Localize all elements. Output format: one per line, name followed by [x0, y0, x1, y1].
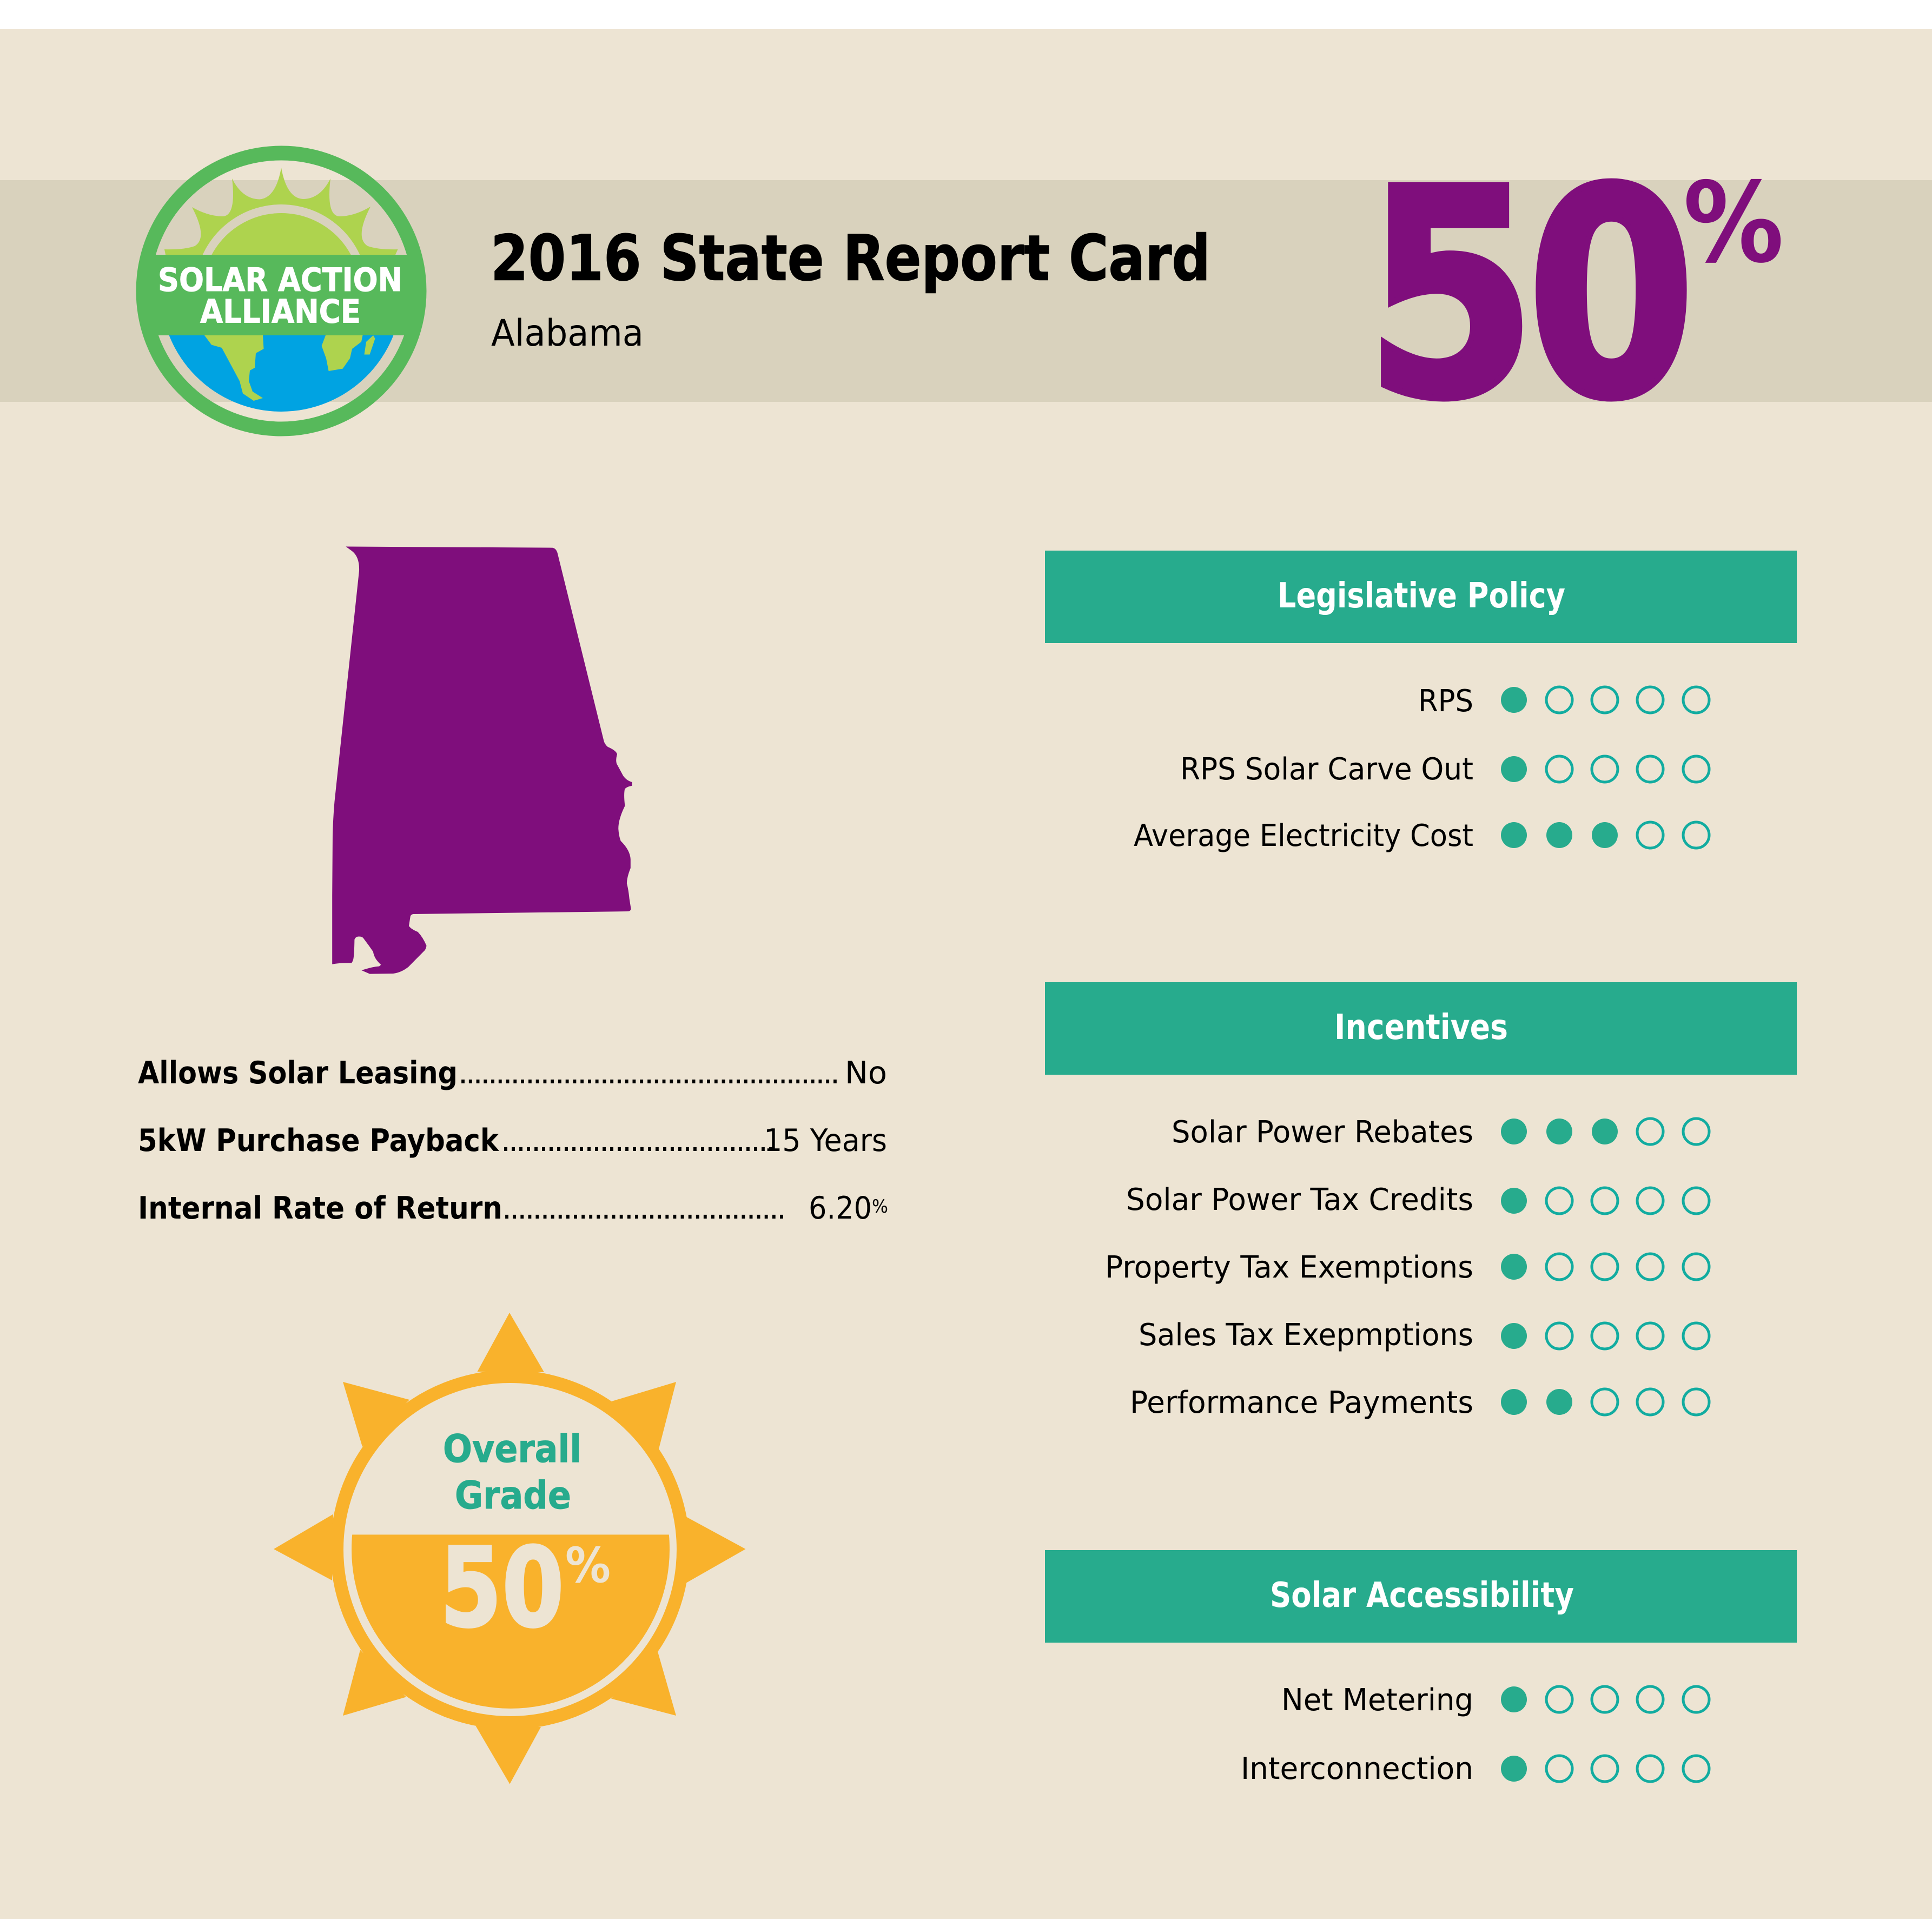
row: RPS solar carve out: [1180, 752, 1709, 787]
title: 2016 State Report Card: [491, 222, 1210, 295]
logo name line 2: ALLIANCE: [200, 293, 361, 331]
big score: 50%: 5: [1365, 128, 1537, 462]
stat: allows solar leasing: ...................................................: [458, 1055, 840, 1091]
grade percent sign: %: [565, 1537, 611, 1594]
stat: purchase payback: 5kW Purchase Payback: [138, 1123, 499, 1159]
big score: 50%: [1365, 128, 1784, 462]
overall grade sun badge: [274, 1313, 745, 1784]
panel: incentives: [1045, 982, 1797, 1420]
heading: Legislative Policy: [1278, 576, 1565, 616]
logo name line 1: SOLAR ACTION: [158, 261, 402, 299]
row: solar power rebates: Solar Power Rebates: [1172, 1115, 1473, 1150]
row: net metering: Net Metering: [1281, 1683, 1473, 1718]
row: sales tax exemptions: Sales Tax Exepmptions: [1139, 1318, 1473, 1353]
big score: 50%: %: [1683, 159, 1784, 288]
stat: allows solar leasing: Allows Solar Leasing: [138, 1055, 458, 1091]
logo sun: [164, 168, 398, 255]
heading: Incentives: [1334, 1008, 1508, 1048]
row: RPS solar carve out: RPS Solar Carve Out: [1180, 752, 1473, 787]
row: performance payments: [1130, 1385, 1709, 1420]
panel: legislative policy: [1045, 551, 1797, 853]
row: solar power tax credits: Solar Power Tax Credits: [1126, 1182, 1473, 1217]
sun rays: [274, 1313, 745, 1784]
row: average electricity cost: [1134, 818, 1709, 853]
stat: purchase payback: ....................................: [501, 1123, 776, 1159]
grade value: 50: [440, 1524, 564, 1652]
row: average electricity cost: Average Electricity Cost: [1134, 818, 1473, 853]
heading bar: [1045, 982, 1797, 1075]
sun ring: [337, 1377, 683, 1723]
heading: Solar Accessibility: [1270, 1576, 1574, 1616]
overall label: Overall: [443, 1427, 581, 1471]
heading bar: [1045, 551, 1797, 643]
row: net metering: [1281, 1683, 1709, 1718]
row: interconnection: [1241, 1751, 1709, 1786]
stat: internal rate of return: 6.20: [809, 1190, 872, 1226]
row: RPS: RPS: [1418, 684, 1473, 719]
heading bar: [1045, 1550, 1797, 1643]
panel: solar accessibility: [1045, 1550, 1797, 1786]
subtitle: state name: Alabama: [491, 312, 644, 355]
big score: 50%: 0: [1527, 128, 1696, 462]
stat: internal rate of return: Internal Rate of Return: [138, 1190, 502, 1226]
map: Alabama silhouette: [332, 546, 632, 974]
half filled disc: [352, 1534, 670, 1709]
row: property tax exemptions: Property Tax Exemptions: [1105, 1250, 1473, 1285]
grade label: Grade: [455, 1473, 571, 1518]
row: RPS: [1418, 684, 1709, 719]
stat: purchase payback: [138, 1123, 887, 1159]
logo ring: [143, 153, 419, 429]
logo: Solar Action Alliance: [143, 153, 419, 429]
row: interconnection: Interconnection: [1241, 1751, 1473, 1786]
row: solar power tax credits: [1126, 1182, 1709, 1217]
logo globe: [169, 335, 394, 412]
stat: allows solar leasing: [138, 1055, 887, 1091]
stat: internal rate of return: %: [872, 1196, 888, 1217]
header band: [0, 180, 1932, 402]
stat: internal rate of return: .....................................: [502, 1190, 786, 1226]
stats list: [138, 1055, 888, 1226]
row: performance payments: Performance Payments: [1130, 1385, 1473, 1420]
row: sales tax exemptions: [1139, 1318, 1709, 1353]
row: property tax exemptions: [1105, 1250, 1709, 1285]
stat: purchase payback: 15 Years: [764, 1123, 887, 1159]
logo banner: [149, 255, 414, 335]
row: solar power rebates: [1172, 1115, 1709, 1150]
stat: allows solar leasing: No: [845, 1055, 887, 1091]
stat: internal rate of return: [138, 1190, 888, 1226]
